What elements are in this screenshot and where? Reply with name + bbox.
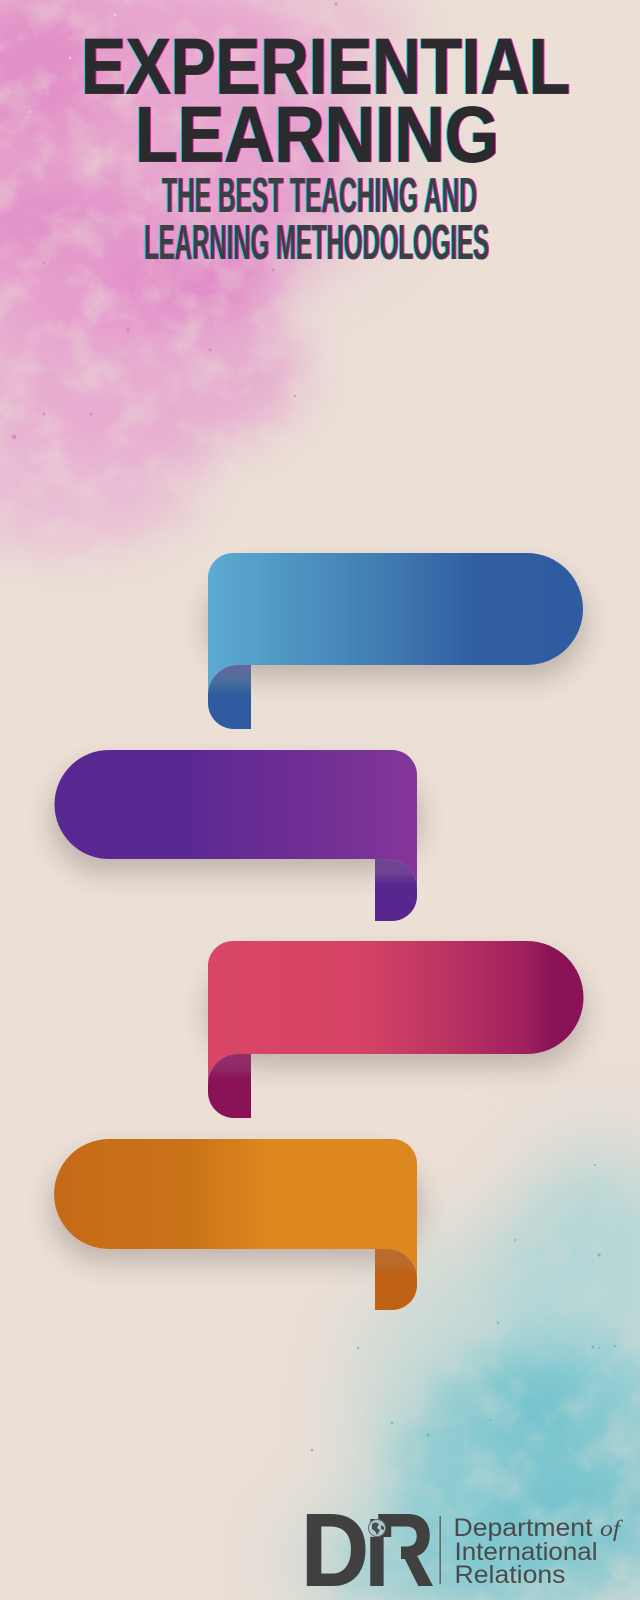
subtitle: The best teaching and learning methodologies xyxy=(144,169,489,270)
logo text xyxy=(454,1514,624,1589)
title: Experiential Learning: EXPERIENTIAL xyxy=(81,22,570,110)
ribbon: orange xyxy=(50,1139,422,1310)
background: pale halo around the washes xyxy=(190,60,640,1600)
icon: globe xyxy=(368,1520,386,1536)
logo divider xyxy=(440,1516,441,1584)
ribbon: purple xyxy=(50,750,422,921)
background: pink watercolor wash xyxy=(0,0,410,550)
ribbon: pink xyxy=(206,941,586,1118)
logo text: Relations xyxy=(454,1561,566,1589)
logo text: International xyxy=(454,1538,598,1566)
title: Experiential Learning xyxy=(81,22,570,178)
logo mark: DiR xyxy=(306,1514,433,1586)
logo text: Department xyxy=(454,1514,593,1542)
logo: Department of International Relations xyxy=(306,1514,623,1586)
background: teal watercolor wash xyxy=(330,1170,640,1600)
logo text: of xyxy=(600,1516,624,1541)
title: Experiential Learning: LEARNING xyxy=(135,90,499,178)
ribbon: blue xyxy=(206,553,586,729)
